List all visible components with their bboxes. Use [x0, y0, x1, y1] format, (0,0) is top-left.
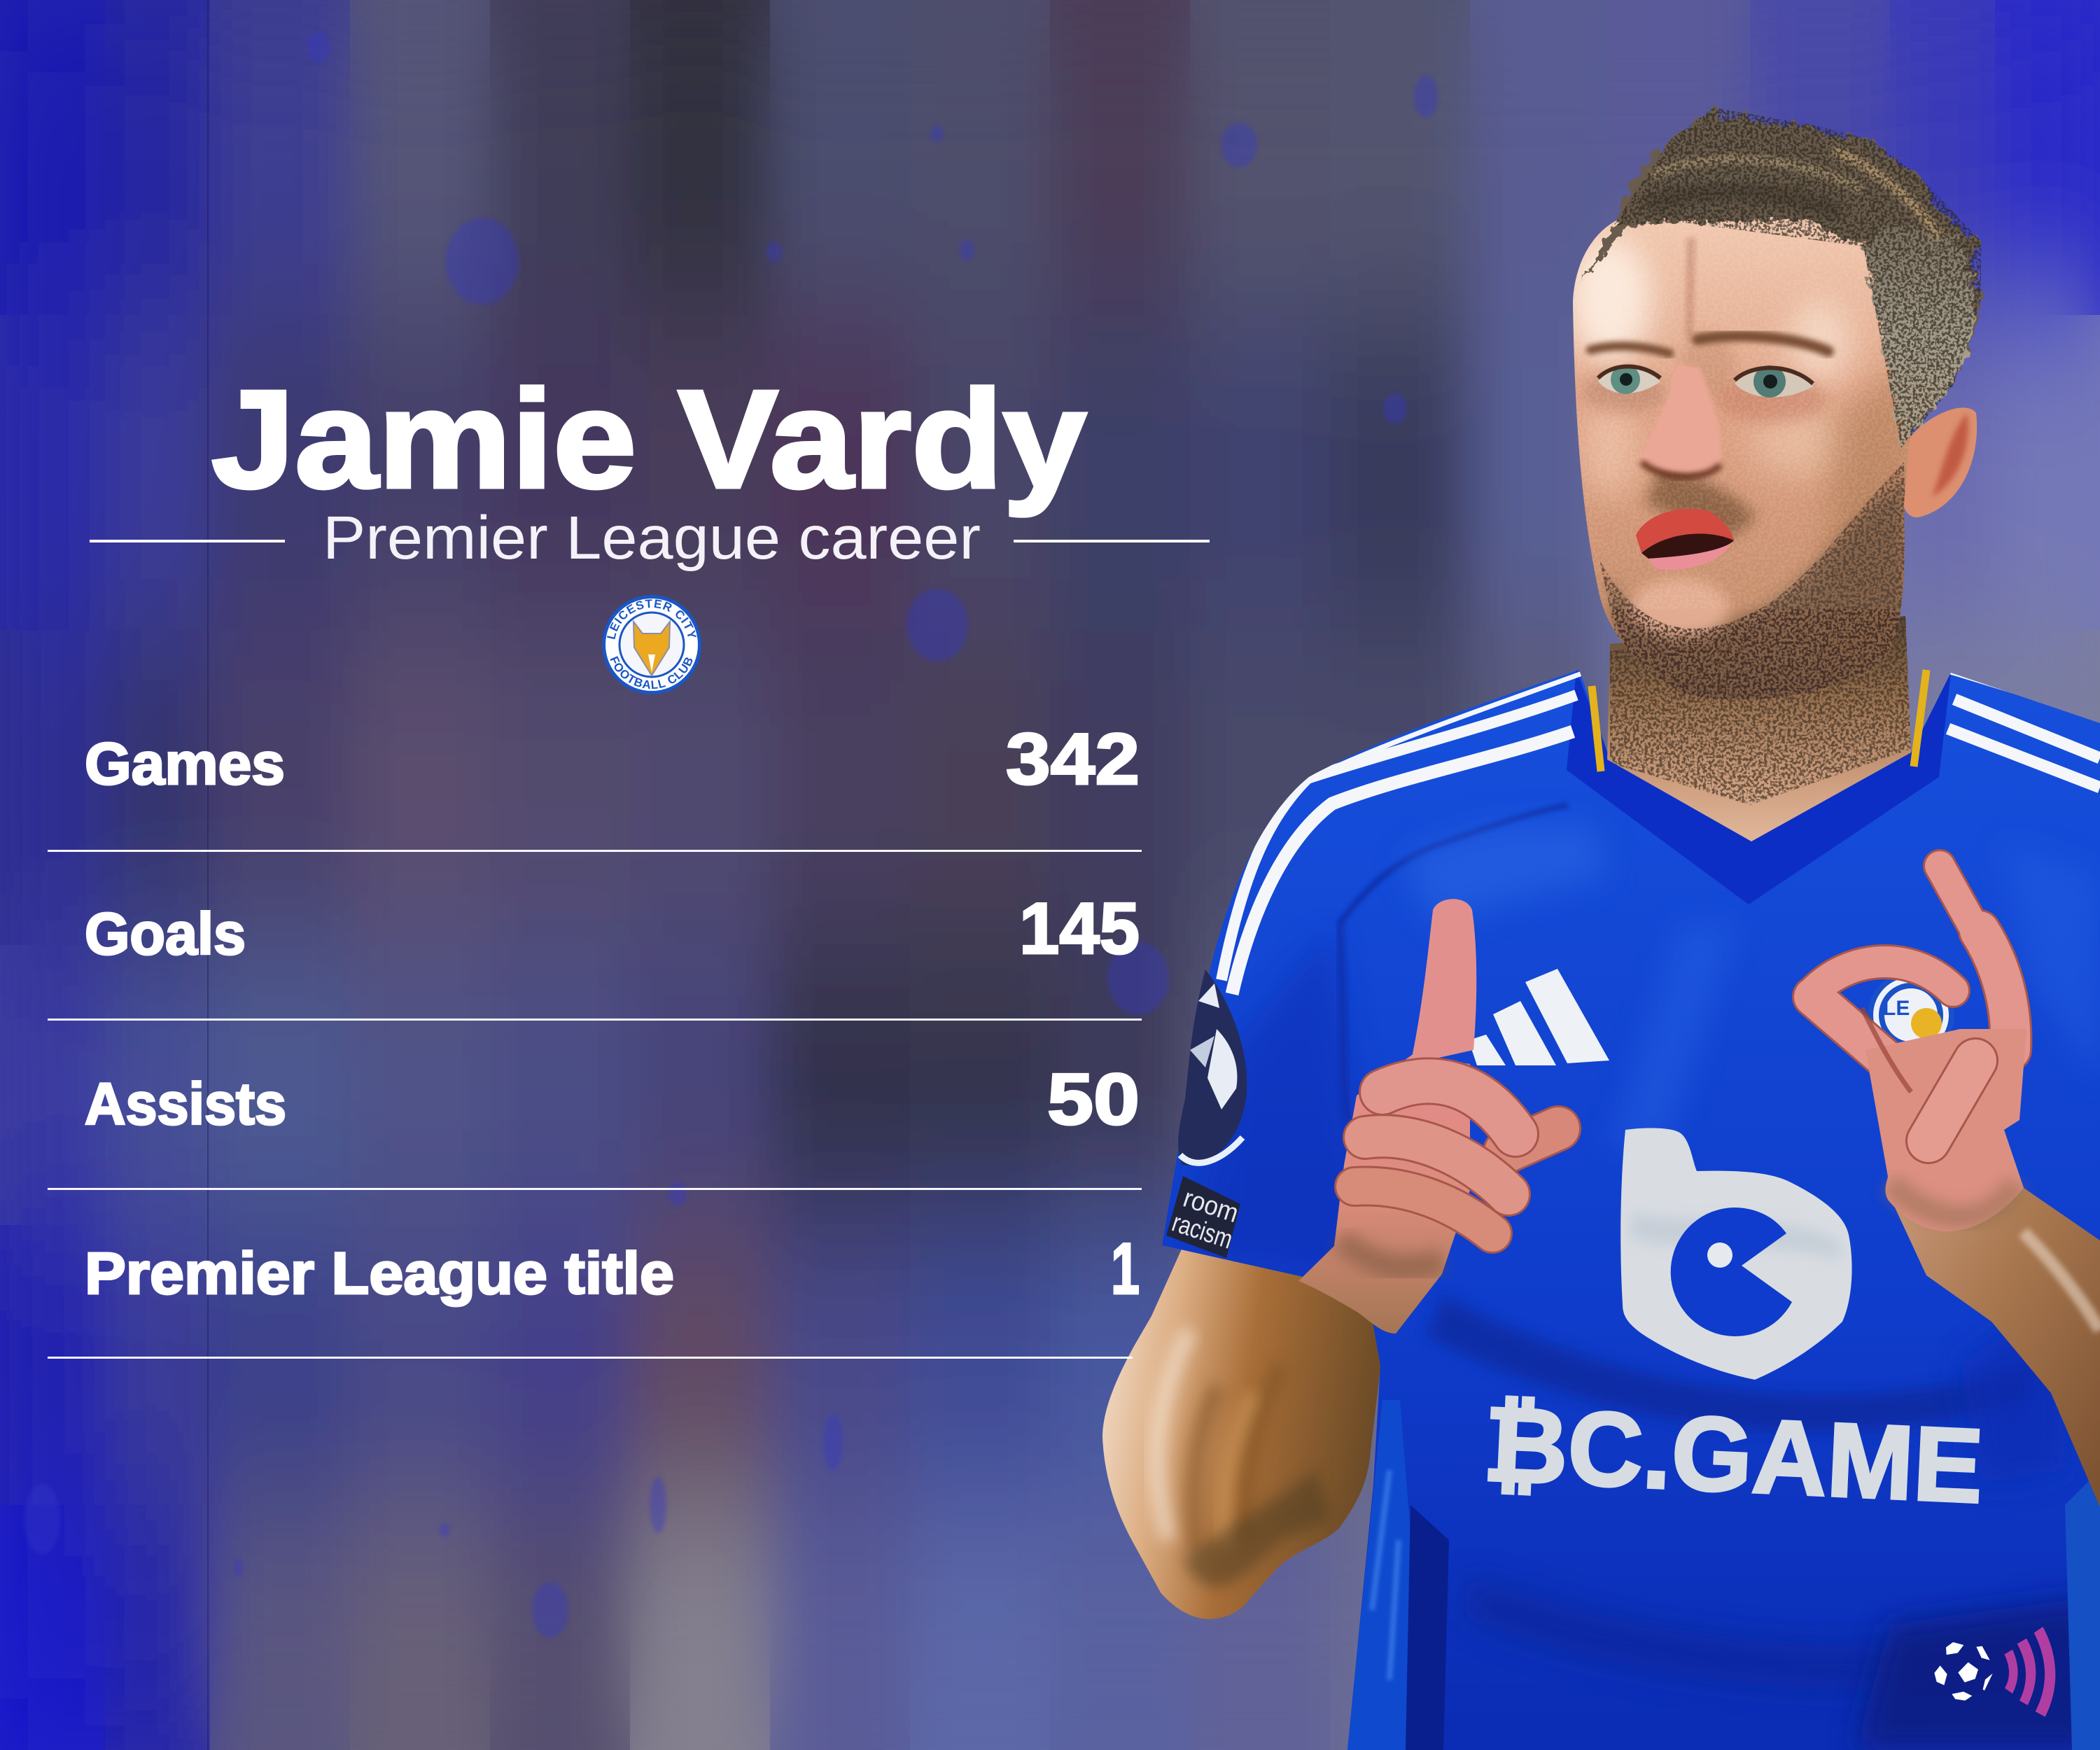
Premier League sleeve badge — [1178, 969, 1247, 1166]
row: Goals: Goals — [85, 901, 246, 967]
title: Jamie Vardy — [211, 362, 1086, 517]
sleeve patch: racism — [1168, 1208, 1236, 1255]
row: Assists: 50 — [1047, 1059, 1140, 1140]
row: Premier League title: Premier League title — [85, 1240, 674, 1306]
subtitle with rules — [90, 504, 1210, 572]
player neck — [1607, 616, 1911, 841]
row: Premier League title: 1 — [1111, 1228, 1140, 1310]
player torso and jersey — [1162, 670, 2100, 1750]
mouth — [1636, 509, 1734, 570]
row: Assists — [85, 1059, 1140, 1140]
row: Assists: Assists — [85, 1071, 286, 1137]
row: Games: Games — [85, 731, 285, 797]
subtitle with rules: Premier League career — [323, 504, 981, 572]
stats table — [48, 719, 1142, 1359]
sponsor wordmark: ₿C.GAME — [1481, 1385, 1985, 1525]
row: Goals — [85, 888, 1140, 969]
Leicester crest on jersey: LE — [1883, 997, 1910, 1020]
player left hand — [1298, 899, 1558, 1334]
player left arm — [1102, 1246, 1393, 1619]
player illustration — [1102, 108, 2100, 1750]
eyes — [1598, 365, 1813, 398]
row: Games — [85, 719, 1140, 800]
icon: Leicester City crest: LEICESTER CITY — [607, 599, 696, 640]
player face — [1568, 217, 1918, 707]
player right forearm — [1890, 1134, 2100, 1507]
player hair — [1583, 108, 1981, 448]
eyebrows — [1590, 336, 1828, 354]
icon: Leicester City crest — [602, 595, 701, 694]
player right hand — [1813, 866, 2026, 1231]
row: Games: 342 — [1006, 719, 1140, 800]
row: Premier League title — [85, 1228, 1140, 1310]
nose — [1639, 364, 1721, 477]
Leicester crest on jersey — [1868, 972, 1954, 1058]
row: Goals: 145 — [1019, 888, 1140, 969]
player ear — [1900, 407, 1977, 517]
icon: Leicester City crest: FOOTBALL CLUB — [610, 656, 693, 689]
jersey shoulder stripes — [1219, 670, 2100, 994]
sponsor logo — [1620, 1128, 1852, 1380]
icon: pink signal arcs — [2004, 1627, 2055, 1717]
sleeve patch — [1166, 1176, 1242, 1258]
jersey collar band — [1567, 670, 1951, 904]
jersey collar trim — [1592, 670, 1926, 771]
sleeve patch: room — [1180, 1184, 1242, 1228]
adidas logo — [1469, 969, 1609, 1065]
icon: football watermark — [1934, 1627, 2055, 1717]
